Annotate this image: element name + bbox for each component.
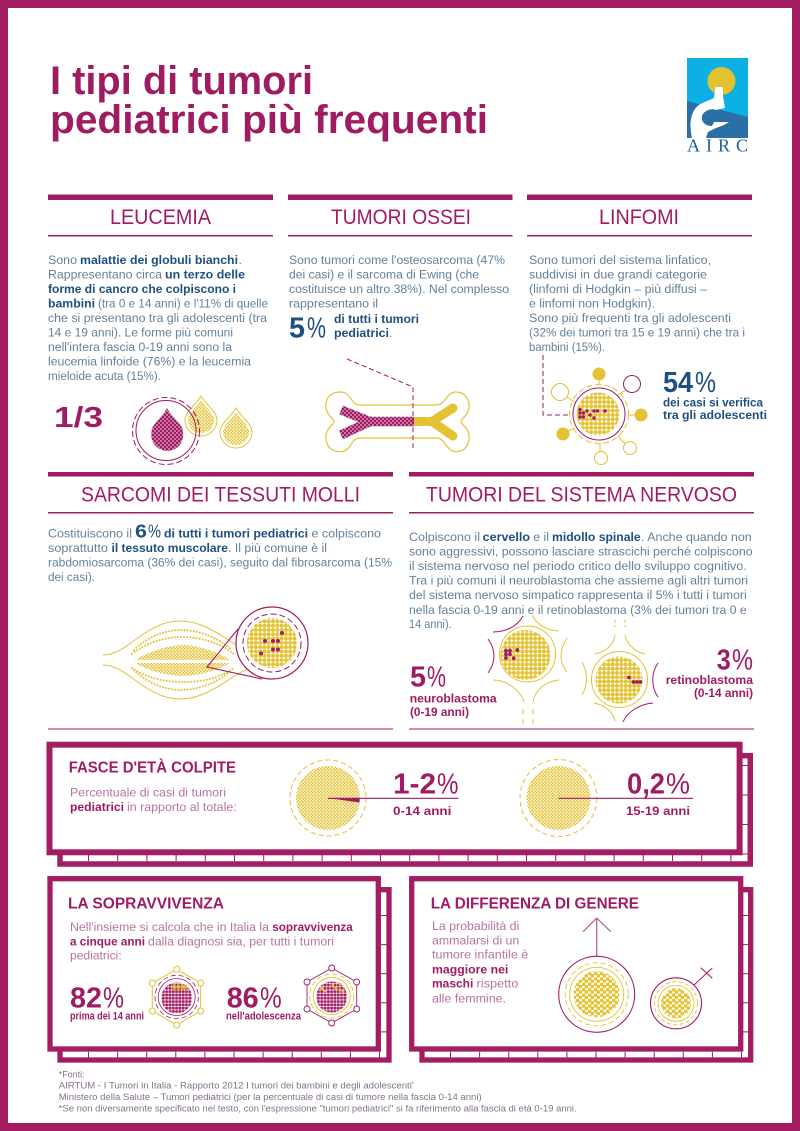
stat: 86%: 86 bbox=[227, 982, 259, 1014]
stat: 82% bbox=[70, 982, 144, 1022]
text: sarcomi: rabdomiosarcoma (36% dei casi), seguito dal fibrosarcoma (15% bbox=[48, 556, 392, 570]
text: sarcomi: soprattutto bbox=[48, 541, 108, 555]
text: sopravvivenza: dalla diagnosi sia, per tutti i tumori bbox=[148, 934, 334, 948]
panel: la sopravvivenza bbox=[50, 879, 389, 1060]
text: linfomi: e linfomi non Hodgkin). bbox=[529, 296, 655, 310]
stat: 1-2%: 0-14 anni bbox=[393, 804, 451, 818]
text: genere: rispetto bbox=[476, 977, 518, 991]
stat: 5% neuroblastoma: 5 bbox=[410, 662, 426, 694]
text: genere: tumore infantile è bbox=[432, 948, 528, 962]
text: linfomi: (linfomi di Hodgkin – più diffusi – bbox=[529, 282, 707, 296]
stat: 0,2%: % bbox=[666, 768, 690, 800]
stat caption bbox=[663, 396, 767, 422]
text: linfomi: Sono più frequenti tra gli adolescenti bbox=[529, 311, 731, 325]
text: tumori ossei: rappresentano il bbox=[289, 296, 378, 310]
icon: bone bbox=[326, 359, 469, 452]
heading: linfomi: LINFOMI bbox=[599, 206, 679, 229]
icon: male symbol bbox=[559, 918, 635, 1032]
heading: fasce: FASCE D'ETÀ COLPITE bbox=[69, 760, 236, 777]
icon: muscle with magnifier bbox=[103, 607, 308, 699]
text: sistema nervoso bbox=[409, 528, 753, 631]
heading: sarcomi: SARCOMI DEI TESSUTI MOLLI bbox=[81, 484, 360, 507]
footnote: sources bbox=[59, 1069, 577, 1115]
text: sarcomi: 6 bbox=[135, 521, 147, 542]
text: tumori ossei: costituisce un altro 38%). Nel complesso bbox=[289, 282, 509, 296]
logo: AIRC: AIRC bbox=[687, 136, 748, 156]
panel: linfomi bbox=[527, 194, 767, 464]
stat: 82%: 82 bbox=[70, 982, 102, 1014]
stat: 5%: 5 bbox=[289, 312, 305, 344]
text: fasce: pediatrici bbox=[70, 800, 124, 814]
stat: 5% neuroblastoma: (0-19 anni) bbox=[410, 705, 469, 719]
text: sistema nervoso: del sistema nervoso simpatico rappresenta il 5% i tutti i tumori bbox=[409, 588, 747, 602]
stat: 82%: prima dei 14 anni bbox=[70, 1010, 144, 1022]
text: genere: maschi bbox=[432, 977, 473, 991]
text: sistema nervoso: il sistema nervoso nel periodo critico dello sviluppo cognitivo. bbox=[409, 559, 747, 573]
icon: hexagon cell magenta bbox=[304, 965, 360, 1026]
stat: 86%: % bbox=[260, 982, 282, 1014]
text: tumori ossei: dei casi) e il sarcoma di Ewing (che bbox=[289, 268, 479, 282]
icon: blood drops bbox=[132, 396, 252, 464]
stat: 3% retinoblastoma bbox=[666, 644, 753, 700]
text: sistema nervoso: cervello bbox=[483, 530, 530, 544]
text: sarcomi: e colpiscono bbox=[312, 527, 381, 541]
text: sarcomi: Costituiscono il bbox=[48, 527, 132, 541]
text: leucemia: Rappresentano circa bbox=[48, 268, 162, 282]
icon: retinoblastoma cell bbox=[582, 620, 658, 722]
text: fasce bbox=[70, 786, 237, 815]
title: pediatrici più frequenti bbox=[50, 98, 488, 142]
text: genere bbox=[432, 919, 528, 1005]
stat caption: tra gli adolescenti bbox=[663, 408, 767, 422]
title bbox=[50, 59, 488, 142]
logo: AIRC bbox=[687, 58, 748, 156]
text: leucemia: leucemia linfoide (76%) e la leucemia bbox=[48, 354, 251, 368]
footnote: sources: AIRTUM - I Tumori in Italia - Rapporto 2012 I tumori dei bambini e degli adolescenti' bbox=[59, 1080, 414, 1091]
text: sistema nervoso: sono aggressivi, possono lasciare strascichi perché colpiscono bbox=[409, 544, 753, 558]
heading: leucemia: LEUCEMIA bbox=[110, 206, 211, 229]
heading: genere: LA DIFFERENZA DI GENERE bbox=[431, 895, 639, 912]
stat: 5% neuroblastoma bbox=[410, 662, 497, 719]
text: sarcomi: di tutti i tumori pediatrici bbox=[164, 527, 308, 541]
panel: sarcomi bbox=[48, 472, 393, 730]
stat caption: dei casi si verifica bbox=[663, 396, 763, 410]
text: sopravvivenza: pediatrici: bbox=[70, 949, 122, 963]
stat caption: pediatrici bbox=[334, 326, 389, 340]
text: linfomi bbox=[529, 253, 745, 354]
heading: sopravvivenza: LA SOPRAVVIVENZA bbox=[68, 895, 224, 912]
text: sopravvivenza: sopravvivenza bbox=[272, 920, 353, 934]
text: linfomi: Sono tumori del sistema linfatico, bbox=[529, 253, 711, 267]
text: tumori ossei bbox=[289, 253, 509, 310]
stat: 1-2%: % bbox=[437, 768, 458, 800]
stat: 82%: % bbox=[103, 982, 124, 1014]
stat: 1-2%: 1-2 bbox=[393, 768, 436, 800]
text: leucemia: che si presentano tra gli adolescenti (tra bbox=[48, 311, 267, 325]
panel: tumori ossei bbox=[288, 194, 512, 452]
text: fasce: in rapporto al totale: bbox=[127, 800, 237, 814]
stat: 86%: nell'adolescenza bbox=[226, 1010, 301, 1022]
title: I tipi di tumori bbox=[50, 59, 313, 103]
text: sistema nervoso: Colpiscono il bbox=[409, 530, 480, 544]
chart: pie 0,2% bbox=[520, 760, 693, 836]
heading: tumori ossei: TUMORI OSSEI bbox=[331, 206, 471, 229]
text: fasce: Percentuale di casi di tumori bbox=[70, 786, 226, 800]
text: leucemia: bambini bbox=[48, 296, 95, 310]
stat: 5% neuroblastoma: % bbox=[427, 662, 446, 694]
text: sistema nervoso: e il bbox=[533, 530, 549, 544]
panel: la differenza di genere bbox=[412, 879, 751, 1060]
heading: sistema nervoso: TUMORI DEL SISTEMA NERVOSO bbox=[426, 484, 737, 507]
stat: 54%: 54 bbox=[663, 367, 693, 399]
stat: 3% retinoblastoma: 3 bbox=[717, 644, 731, 676]
text: genere: ammalarsi di un bbox=[432, 933, 519, 947]
text: leucemia: . bbox=[238, 253, 242, 267]
footnote: sources: *Se non diversamente specificato nel testo, con l'espressione "tumori pediatrici" si fa riferimento alla fascia di età 0-19 anni. bbox=[59, 1104, 577, 1115]
stat: 1/3: 1/3 bbox=[54, 402, 103, 434]
text: sopravvivenza: Nell'insieme si calcola che in Italia la bbox=[70, 920, 269, 934]
stat: 3% retinoblastoma: (0-14 anni) bbox=[694, 686, 753, 700]
text: sistema nervoso: Tra i più comuni il neuroblastoma che assieme agli altri tumori bbox=[409, 574, 748, 588]
stat caption bbox=[334, 312, 419, 340]
text: leucemia: Sono bbox=[48, 253, 77, 267]
text: linfomi: bambini (15%). bbox=[529, 340, 605, 354]
text: leucemia: forme di cancro che colpiscono i bbox=[48, 282, 236, 296]
stat: 3% retinoblastoma: retinoblastoma bbox=[666, 673, 753, 687]
icon: female symbol bbox=[650, 968, 712, 1029]
stat caption: . bbox=[389, 326, 392, 340]
stat caption: di tutti i tumori bbox=[334, 312, 419, 326]
panel: leucemia bbox=[48, 194, 273, 464]
text: sarcomi: % bbox=[148, 521, 161, 542]
stat: 86% bbox=[226, 982, 301, 1022]
chart: pie 1-2% bbox=[290, 760, 458, 836]
text: sarcomi: il tessuto muscolare bbox=[112, 541, 228, 555]
text: leucemia: (tra 0 e 14 anni) e l'11% di quelle bbox=[98, 296, 268, 310]
text: genere: La probabilità di bbox=[432, 919, 519, 933]
text: sistema nervoso: nella fascia 0-19 anni e il retinoblastoma (3% dei tumori tra 0 e bbox=[409, 603, 747, 617]
icon: neuroblastoma cell bbox=[488, 615, 567, 725]
footnote: sources: *Fonti: bbox=[59, 1069, 85, 1080]
stat: 0,2%: 15-19 anni bbox=[626, 804, 690, 818]
stat: 0,2% bbox=[626, 768, 690, 818]
text: linfomi: (32% dei tumori tra 15 e 19 anni) che tra i bbox=[529, 326, 745, 340]
text: tumori ossei: Sono tumori come l'osteosarcoma (47% bbox=[289, 253, 505, 267]
panel: fasce d'età colpite bbox=[50, 745, 750, 864]
text: genere: maggiore nei bbox=[432, 962, 508, 976]
text: sarcomi: dei casi). bbox=[48, 570, 95, 584]
stat: 5%: % bbox=[307, 312, 326, 344]
icon: lymphocyte bbox=[543, 355, 648, 464]
text: sarcomi bbox=[48, 521, 392, 584]
text: sistema nervoso: midollo spinale bbox=[552, 530, 641, 544]
stat: 54%: % bbox=[695, 367, 716, 399]
text: leucemia: nell'intera fascia 0-19 anni sono la bbox=[48, 340, 232, 354]
text: linfomi: suddivisi in due grandi categorie bbox=[529, 268, 707, 282]
stat: 0,2%: 0,2 bbox=[627, 768, 665, 800]
stat: 1-2% bbox=[393, 768, 458, 818]
text: leucemia bbox=[48, 251, 268, 383]
text: leucemia: un terzo delle bbox=[165, 268, 245, 282]
panel: sistema nervoso bbox=[409, 472, 754, 730]
text: sarcomi: . Il più comune è il bbox=[228, 541, 327, 555]
text: leucemia: mieloide acuta (15%). bbox=[48, 369, 161, 383]
text: leucemia: malattie dei globuli bianchi bbox=[80, 253, 238, 267]
text: sistema nervoso: . Anche quando non bbox=[641, 530, 752, 544]
text: sopravvivenza: a cinque anni bbox=[70, 934, 145, 948]
footnote: sources: Ministero della Salute – Tumori pediatrici (per la percentuale di casi di tumore nella fascia 0-14 anni) bbox=[59, 1092, 482, 1103]
text: genere: alle femmine. bbox=[432, 991, 506, 1005]
text: leucemia: 14 e 19 anni). Le forme più comuni bbox=[48, 326, 233, 340]
stat: 5% neuroblastoma: neuroblastoma bbox=[410, 692, 497, 706]
text: sistema nervoso: 14 anni). bbox=[409, 617, 452, 631]
icon: hexagon cell yellow bbox=[149, 966, 204, 1028]
text: sopravvivenza bbox=[70, 918, 353, 963]
stat: 3% retinoblastoma: % bbox=[732, 644, 753, 676]
